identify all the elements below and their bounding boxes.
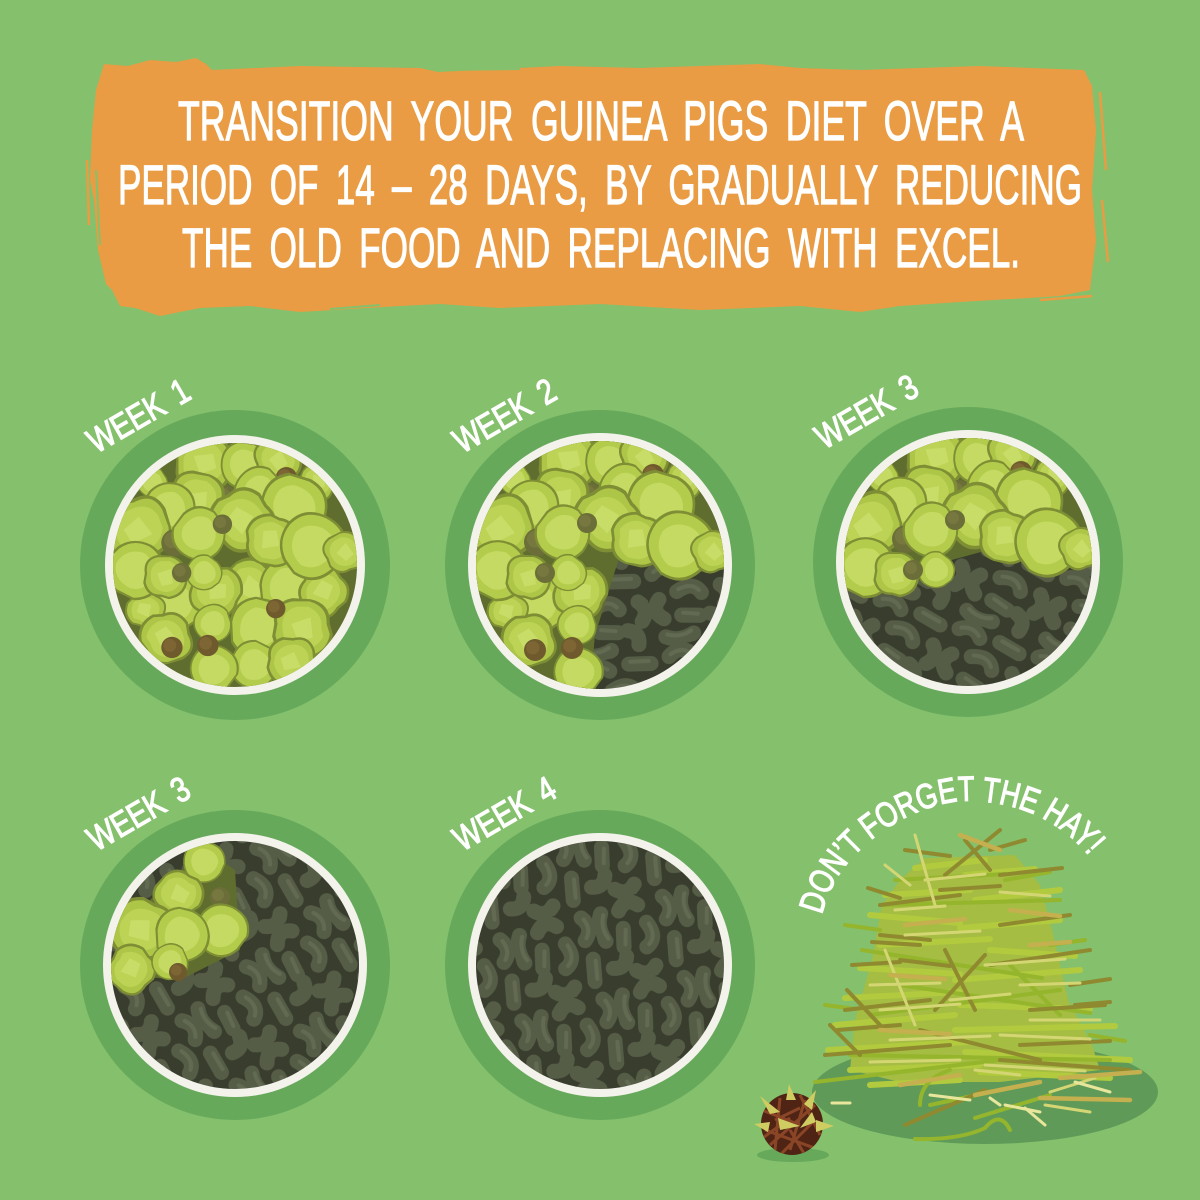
bowl: week 3 upper (813, 407, 1123, 717)
label: week 4: WEEK 4 (446, 769, 563, 859)
illustration: hay pile (815, 830, 1140, 1139)
illustration: hay ball (754, 1084, 834, 1162)
bowl: week 1 (80, 410, 390, 720)
label: week 1: WEEK 1 (80, 371, 197, 461)
flake cluster (111, 843, 250, 996)
bowl: week 3 lower (80, 810, 390, 1120)
label: week 3 upper: WEEK 3 (808, 367, 925, 457)
banner brush shape (87, 58, 1108, 316)
straw tufts (754, 1084, 834, 1132)
hay shadow (812, 1040, 1158, 1144)
ball body (761, 1093, 823, 1155)
bowl: week 2 (445, 410, 755, 720)
banner (87, 58, 1108, 316)
bowl: week 4 (445, 810, 755, 1120)
curved label: don't forget the hay: DON’T FORGET THE HAY! (798, 776, 1106, 914)
banner text (118, 89, 1082, 279)
ball shadow (757, 1148, 829, 1162)
label: week 2: WEEK 2 (446, 371, 563, 461)
label: week 3 lower: WEEK 3 (80, 769, 197, 859)
